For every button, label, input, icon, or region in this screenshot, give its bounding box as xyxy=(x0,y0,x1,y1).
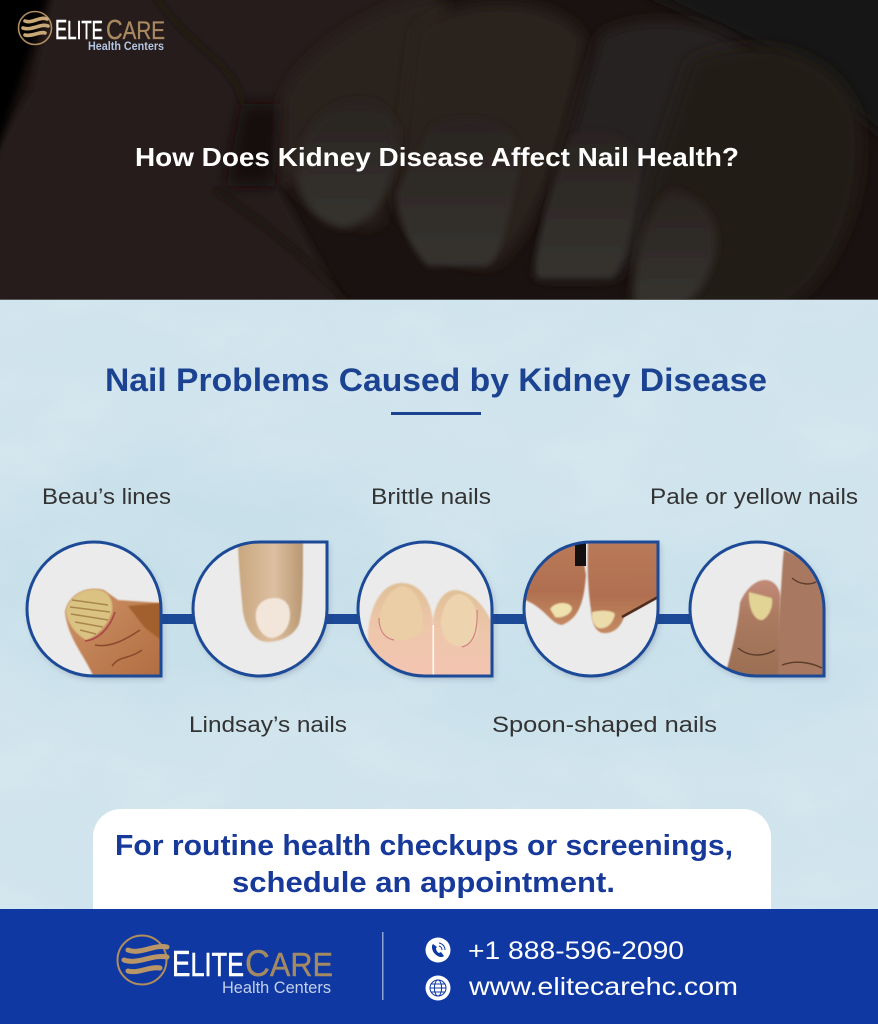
text: footer logo wordmark: CARE xyxy=(245,943,333,984)
website: www.elitecarehc.com xyxy=(468,973,738,1001)
photo: darkened fingers and nails xyxy=(0,0,878,310)
panel: header photo xyxy=(0,0,878,310)
heading underline xyxy=(391,412,481,415)
logo: Elite Care footer xyxy=(118,936,333,997)
icon: phone xyxy=(426,938,450,962)
text: logo wordmark: CARE xyxy=(106,14,165,45)
heading: nail problems: Nail Problems Caused by Kidney Disease xyxy=(105,362,767,398)
title: How Does Kidney Disease Affect Nail Health? xyxy=(135,142,739,172)
phone number: +1 888-596-2090 xyxy=(468,937,684,965)
photo badge: Spoon-shaped nails xyxy=(520,540,660,676)
text: footer logo wordmark: ELITE xyxy=(172,943,244,984)
photo badge: Pale or yellow nails xyxy=(690,542,830,680)
label: Pale or yellow nails: Pale or yellow nails xyxy=(650,484,858,509)
icon: logo ring xyxy=(18,12,52,44)
label: Beau's lines: Beau’s lines xyxy=(42,484,171,509)
connector chain xyxy=(160,614,691,624)
callout text line two: schedule an appointment. xyxy=(232,867,615,899)
callout text line one: For routine health checkups or screenings, xyxy=(115,830,733,862)
logo: Elite Care header xyxy=(18,12,165,53)
photo badge: Beau's lines xyxy=(27,542,161,680)
label: Lindsay's nails: Lindsay’s nails xyxy=(189,712,347,737)
callout: appointment xyxy=(93,809,771,912)
text: logo wordmark: ELITE xyxy=(55,14,103,45)
divider xyxy=(382,932,384,1000)
label: Spoon-shaped nails: Spoon-shaped nails xyxy=(492,712,717,737)
icon: footer logo ring xyxy=(118,936,167,984)
label: Brittle nails: Brittle nails xyxy=(371,484,491,509)
panel: blue textured background xyxy=(0,300,878,1024)
icon: globe xyxy=(426,976,450,1000)
photo badge: Lindsay's nails xyxy=(193,540,327,676)
panel: footer xyxy=(0,909,878,1024)
text: footer logo wordmark xyxy=(172,943,333,997)
text: logo wordmark: Health Centers xyxy=(88,41,164,53)
photo badge: Brittle nails xyxy=(358,542,494,680)
text: logo wordmark xyxy=(56,20,164,50)
text: footer logo wordmark: Health Centers xyxy=(222,978,331,997)
